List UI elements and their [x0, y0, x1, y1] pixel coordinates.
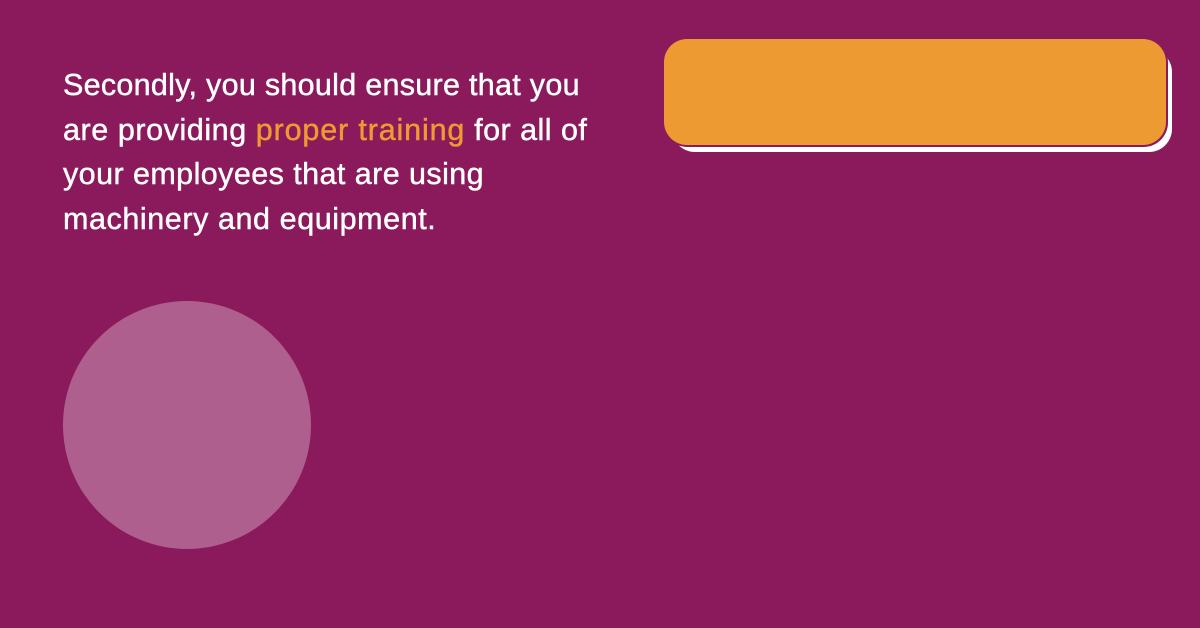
panel: orange rounded box with white offset shadow — [664, 39, 1172, 152]
text block: training message: are providing proper training for all of — [63, 113, 587, 147]
text block: training message: your employees that are using — [63, 157, 484, 191]
text block: training message — [62, 68, 588, 236]
white offset shadow — [672, 49, 1172, 152]
orange box — [664, 39, 1166, 145]
text block: training message: machinery and equipment. — [63, 202, 436, 236]
text block: training message: Secondly, you should ensure that you — [63, 68, 580, 102]
icon placeholder: pale circle — [63, 301, 311, 549]
